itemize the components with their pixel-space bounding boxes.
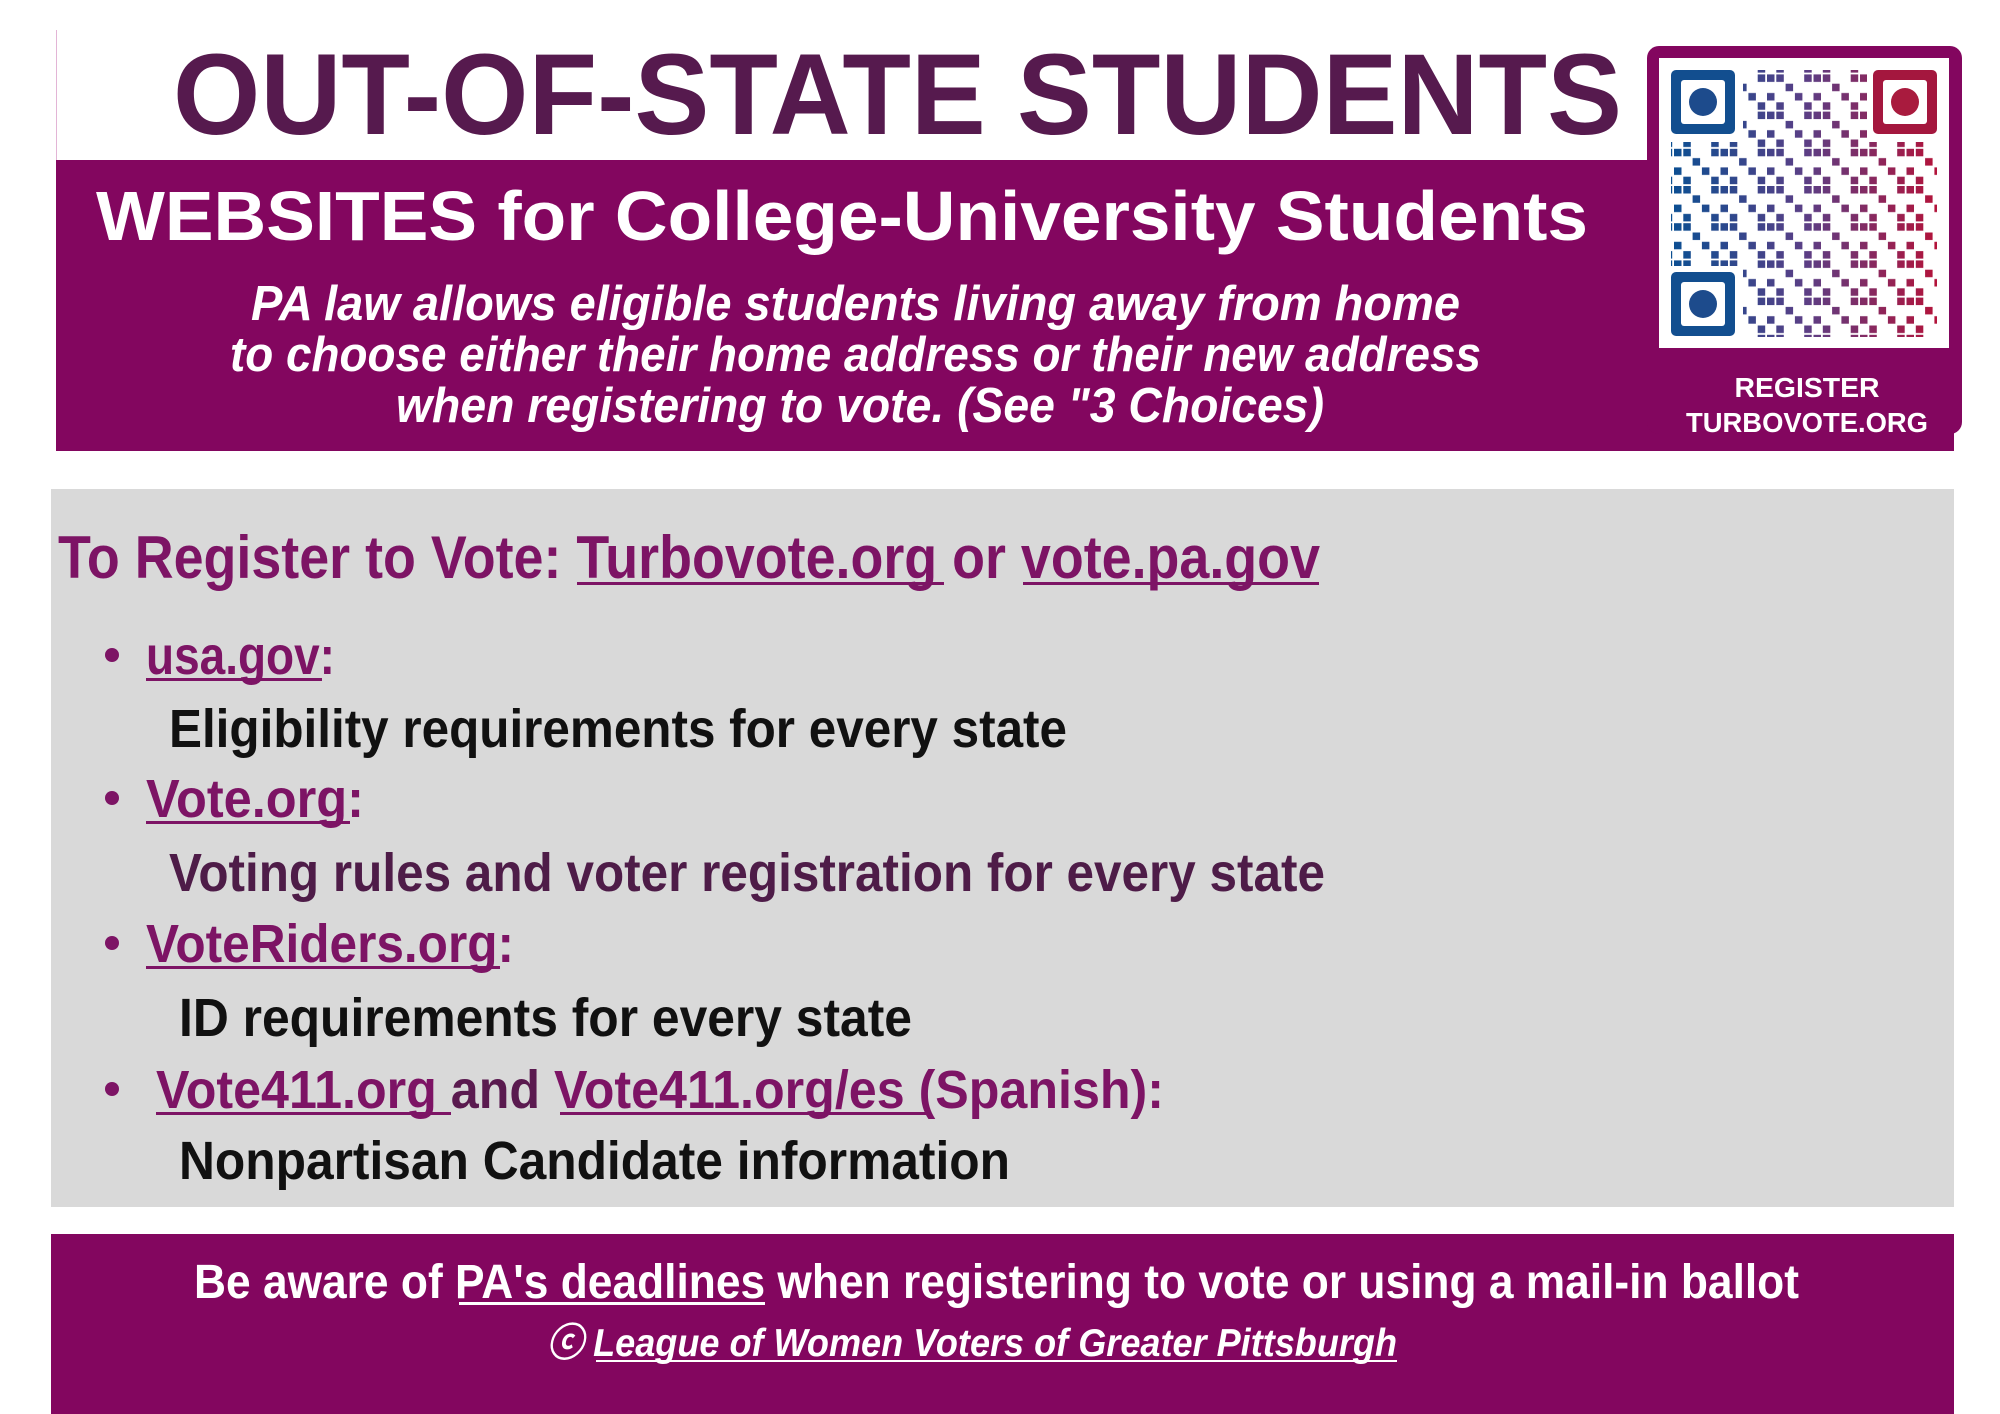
intro text: PA law allows eligible students living away from home — [251, 277, 1460, 331]
header white area with left rule — [56, 30, 57, 160]
item: VoteRiders.org: VoteRiders.org: — [146, 914, 514, 974]
panel: footer — [51, 1234, 1954, 1414]
subtitle: WEBSITES for College-University Students — [96, 177, 1588, 255]
intro text: to choose either their home address or their new address — [230, 328, 1481, 382]
item: VoteRiders.org — [105, 914, 912, 1048]
heading: register to vote: To Register to Vote: Turbovote.org or vote.pa.gov — [58, 524, 1321, 591]
copyright: ⓒ League of Women Voters of Greater Pittsburgh — [547, 1322, 1397, 1365]
item: VoteRiders.org: ID requirements for every state — [179, 988, 912, 1048]
finder patterns — [1671, 70, 1937, 336]
QR code panel: TURBOVOTE.ORG — [1686, 407, 1928, 438]
intro text — [230, 277, 1481, 433]
item: Vote411 — [105, 1060, 1164, 1191]
item: Vote.org — [105, 769, 1325, 903]
item: Vote.org: Voting rules and voter registration for every state — [169, 843, 1325, 903]
panel: purple header band — [56, 160, 1954, 451]
title: OUT-OF-STATE STUDENTS — [173, 31, 1622, 159]
item: Vote411: Vote411.org and Vote411.org/es (Spanish): — [156, 1060, 1164, 1120]
QR caption: REGISTER — [1734, 372, 1880, 403]
item: Vote.org: Vote.org: — [146, 769, 364, 829]
panel: websites list — [51, 489, 1954, 1207]
item: usa.gov — [105, 626, 1067, 759]
QR modules — [1671, 70, 1937, 337]
item: usa.gov: usa.gov: — [146, 626, 335, 686]
deadlines note: Be aware of PA's deadlines when registering to vote or using a mail-in ballot — [194, 1256, 1799, 1309]
item: usa.gov: Eligibility requirements for every state — [169, 699, 1067, 759]
item: Vote411: Nonpartisan Candidate information — [179, 1131, 1010, 1191]
intro text: when registering to vote. (See "3 Choices) — [396, 379, 1324, 433]
QR code panel — [1647, 46, 1962, 438]
